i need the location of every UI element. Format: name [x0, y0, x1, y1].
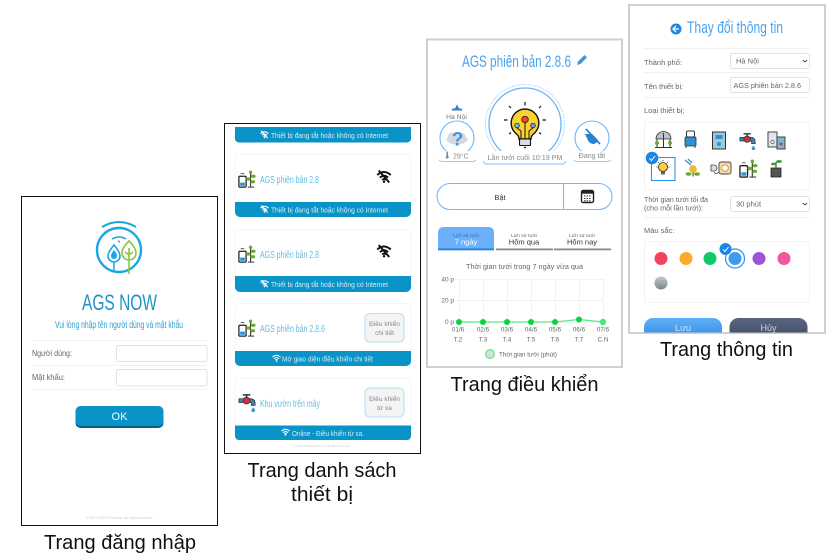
icon: calendar — [582, 190, 594, 202]
button: remote control — [365, 388, 404, 417]
legend: Thời gian tưới (phút) — [499, 352, 557, 358]
panel: device info screen — [629, 5, 825, 342]
button: detailed control — [365, 314, 404, 342]
icon: pencil — [577, 55, 587, 65]
x axis labels: T.6 — [551, 336, 560, 344]
y axis labels: 0 p — [445, 319, 454, 326]
button: detailed control: chi tiết — [375, 328, 394, 337]
subtitle: Vui lòng nhập tên người dùng và mật khẩu — [55, 319, 183, 331]
field: device type — [644, 106, 810, 190]
chart: watering time over 7 days — [441, 262, 610, 358]
field: city: Thành phố: — [644, 58, 682, 67]
field: device name — [644, 78, 810, 92]
button: save — [644, 318, 722, 332]
x axis labels — [452, 326, 610, 344]
temperature: 29°C — [453, 152, 469, 160]
tab: today: Lịch sử tưới — [569, 232, 595, 239]
button group: on and schedule — [437, 184, 612, 210]
widget: weather — [439, 104, 476, 162]
x axis labels: T.4 — [503, 336, 512, 344]
caption: device list: Trang danh sách — [248, 460, 396, 482]
tab: today — [554, 232, 611, 250]
x axis labels: 04/6 — [525, 326, 538, 334]
icon: plant with bulb — [685, 159, 700, 176]
field: city — [644, 54, 810, 68]
status band: top card: Thiết bị đang tắt hoặc không có Internet — [271, 131, 389, 140]
card: Khu vườn trên mây: Online - Điều khiển từ xa. — [292, 429, 364, 438]
icon: phone with plant — [740, 159, 758, 177]
card: Khu vườn trên mây — [235, 378, 411, 440]
button group: on and schedule: Bật — [494, 193, 507, 202]
y axis labels — [441, 276, 454, 326]
footer note: © 2017-2020 IoTeamvn. All rights reserved. — [293, 444, 351, 448]
icon: colour selected badge — [720, 243, 732, 255]
caption: device list — [248, 460, 396, 506]
button: OK: OK — [112, 411, 128, 423]
button: OK — [76, 406, 164, 428]
field: password: Mật khẩu: — [32, 372, 65, 382]
field: maximum watering time: (cho mỗi lần tưới): — [644, 204, 703, 212]
tab: yesterday: Hôm qua — [509, 238, 540, 246]
icon: control box — [712, 132, 726, 149]
data line — [456, 316, 606, 325]
x axis labels: 02/6 — [477, 326, 490, 334]
title: change information: Thay đổi thông tin — [687, 18, 783, 37]
caption: login: Trang đăng nhập — [44, 532, 196, 554]
footer note: © 2017-2020 IoTeamvn. All rights reserved. — [86, 516, 153, 520]
card: AGS phiên bản 2.8.6: Mở giao diện điều khiển chi tiết — [282, 354, 374, 364]
button: cancel: Hủy — [760, 323, 777, 333]
card: AGS phiên bản 2.8.6 — [235, 304, 411, 366]
card: AGS phiên bản 2.8 second: Thiết bị đang tắt hoặc không có Internet — [271, 280, 389, 289]
button: remote control: Điều khiển — [369, 394, 400, 403]
icon: power socket — [711, 162, 731, 174]
field: password — [32, 370, 207, 386]
field: colour picker — [644, 226, 810, 302]
card: Khu vườn trên mây: Khu vườn trên mây — [260, 398, 320, 410]
card: AGS phiên bản 2.8: Thiết bị đang tắt hoặc không có Internet — [271, 206, 389, 214]
panel: control screen — [427, 40, 622, 367]
card: AGS phiên bản 2.8: AGS phiên bản 2.8 — [260, 174, 319, 186]
x axis labels: T.7 — [575, 336, 584, 344]
x axis labels: 05/6 — [549, 326, 562, 334]
icon: seedling box — [771, 160, 782, 177]
caption: device list: thiết bị — [291, 484, 353, 506]
panel: login screen — [22, 196, 218, 526]
field: device type: Loại thiết bị: — [644, 106, 684, 115]
x axis labels: T.5 — [527, 336, 536, 344]
field: city: Hà Nội — [736, 56, 759, 66]
icon: selected badge — [646, 152, 658, 164]
card: AGS phiên bản 2.8 — [235, 154, 411, 217]
gauge: main bulb: Lần tưới cuối 10:19 PM — [488, 153, 563, 162]
button: remote control: từ xa — [377, 405, 392, 412]
field: maximum watering time: 30 phút — [736, 200, 762, 208]
chart: watering time over 7 days: Thời gian tưới trong 7 ngày vừa qua — [466, 262, 583, 271]
icon: selected bulb — [652, 158, 675, 180]
tab: yesterday: Lịch sử tưới — [511, 232, 537, 239]
button: save: Lưu — [675, 323, 691, 333]
tabs: history range — [438, 227, 611, 250]
icon: sprinkler — [655, 132, 672, 148]
icon: AGS NOW logo — [97, 222, 141, 274]
card: AGS phiên bản 2.8 second — [235, 230, 411, 292]
field: colour picker: Màu sắc: — [644, 226, 674, 235]
button: detailed control: Điều khiển — [369, 319, 400, 328]
icon: unknown weather: ? — [452, 130, 463, 150]
icon: muted droplet — [585, 129, 600, 144]
icon: device pump — [685, 131, 696, 148]
icon: faucet — [740, 134, 755, 150]
x axis labels: 06/6 — [573, 326, 586, 334]
tab: 7 days: Lịch sử tưới — [453, 232, 479, 239]
tab: 7 days — [438, 227, 494, 250]
field: device name: Tên thiết bị: — [644, 82, 683, 91]
status band: top card — [235, 127, 411, 143]
title: AGS phiên bản 2.8.6: AGS phiên bản 2.8.6 — [462, 52, 571, 71]
caption: control: Trang điều khiển — [450, 374, 598, 396]
y axis labels: 40 p — [441, 276, 454, 284]
field: username — [32, 346, 207, 362]
icon: back arrow — [670, 24, 682, 34]
x axis labels: 07/6 — [597, 326, 610, 334]
field: maximum watering time: Thời gian tưới tối đa — [644, 195, 709, 204]
x axis labels: T.2 — [454, 336, 463, 344]
tab: 7 days: 7 ngày — [455, 238, 478, 246]
caption: info: Trang thông tin — [660, 339, 793, 361]
title: AGS NOW: AGS NOW — [82, 290, 157, 315]
button: cancel — [730, 318, 808, 332]
icon: controller pair — [768, 132, 785, 149]
x axis labels: C.N — [598, 336, 609, 344]
widget: weather: Hà Nội — [446, 114, 467, 121]
field: maximum watering time — [644, 195, 810, 212]
card: AGS phiên bản 2.8.6: AGS phiên bản 2.8.6 — [260, 323, 325, 335]
gauge: main bulb — [483, 84, 566, 164]
icon: light bulb — [504, 102, 546, 148]
field: username: Người dùng: — [32, 348, 72, 358]
icon: location pin — [452, 104, 462, 110]
field: device name: AGS phiên bản 2.8.6 — [734, 81, 801, 90]
widget: state off — [574, 121, 611, 162]
tab: today: Hôm nay — [567, 238, 597, 246]
x axis labels: 03/6 — [501, 326, 514, 334]
card: AGS phiên bản 2.8 second: AGS phiên bản 2.8 — [260, 249, 319, 261]
panel: device list screen — [224, 124, 420, 454]
x axis labels: 01/6 — [452, 326, 465, 334]
tab: yesterday — [496, 232, 553, 250]
widget: state off: Đang tắt — [579, 151, 605, 160]
legend — [486, 350, 557, 358]
x axis labels: T.3 — [479, 336, 488, 344]
y axis labels: 20 p — [441, 298, 454, 304]
